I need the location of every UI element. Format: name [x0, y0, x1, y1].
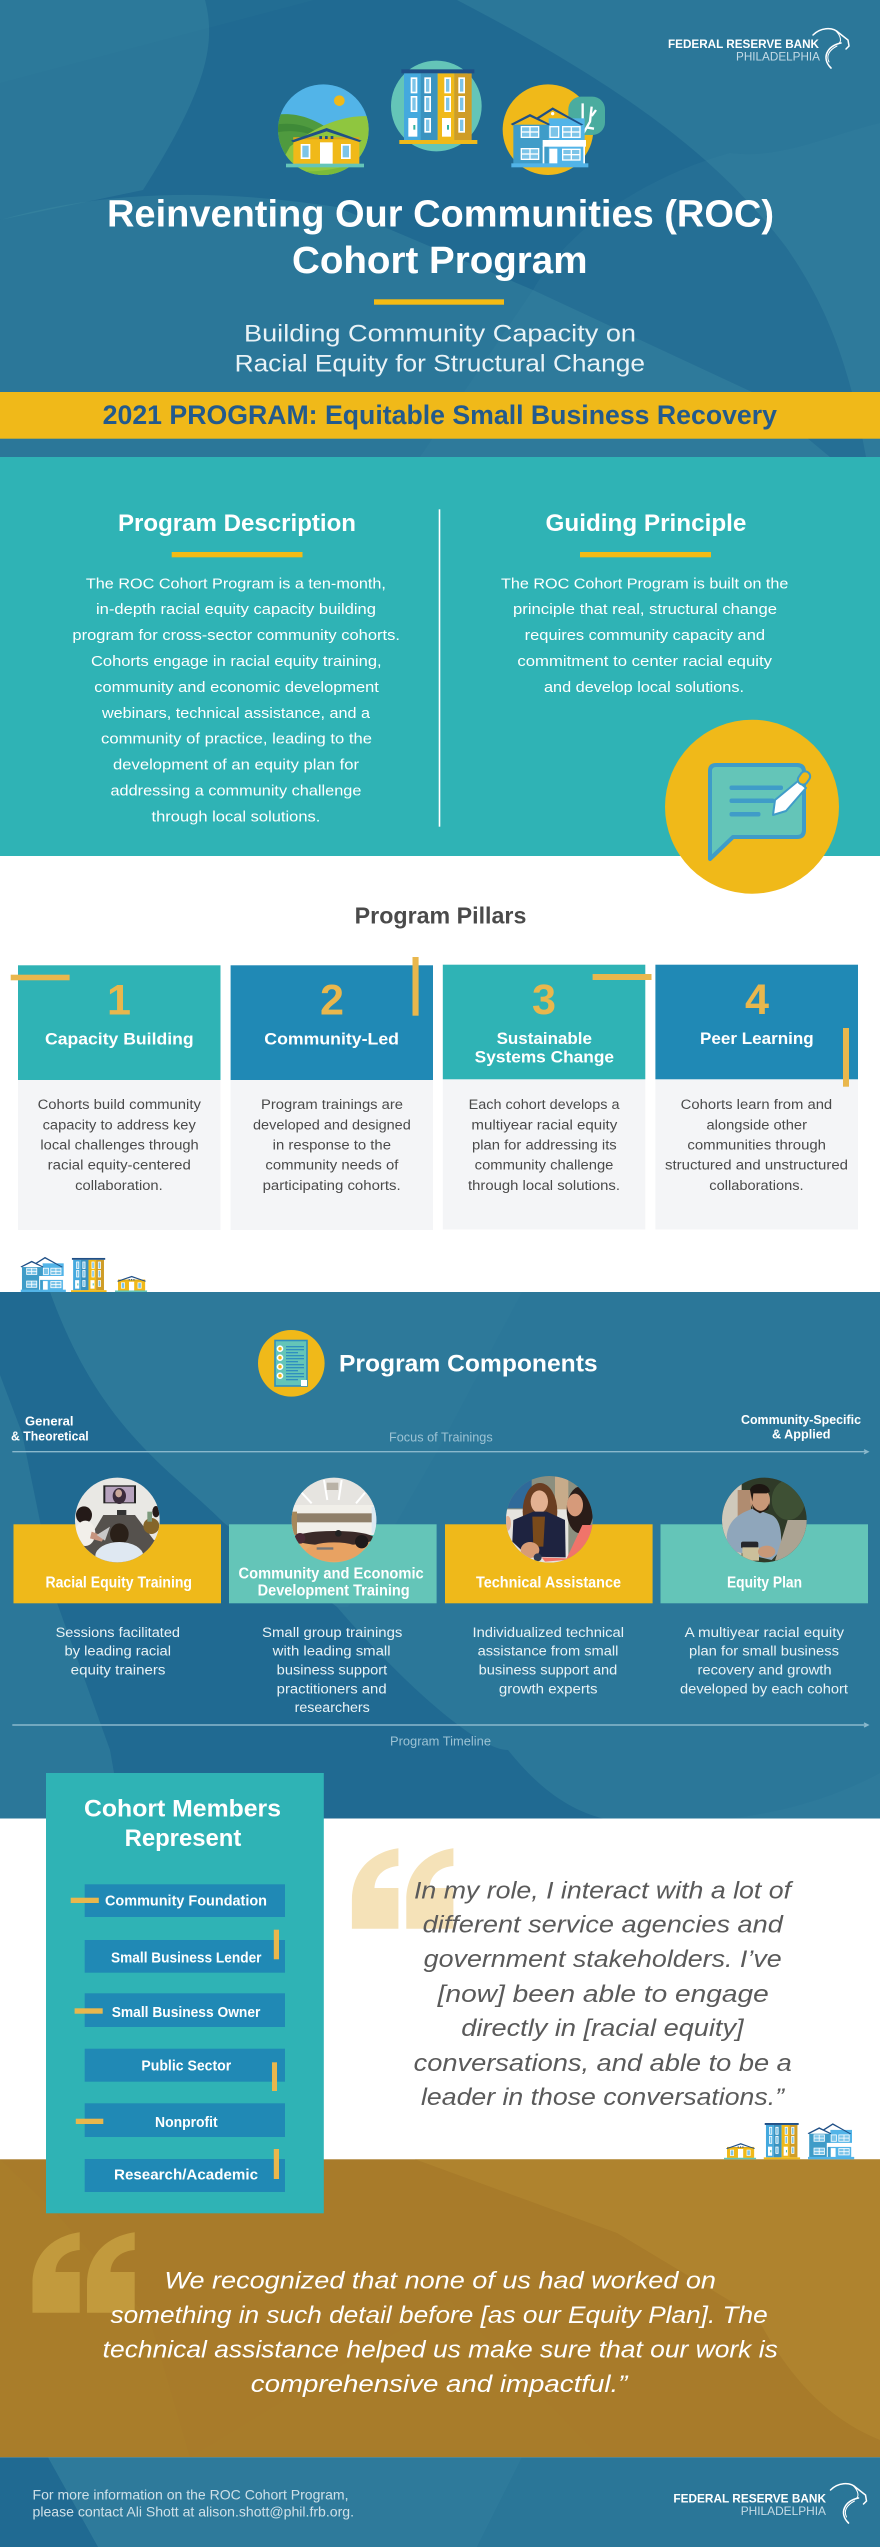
heading: cohort members represent: [84, 1796, 281, 1852]
text: program description: development of an equity plan for: [113, 758, 359, 774]
panel: component 2 community and economic development training: Community and Economic: [238, 1565, 424, 1582]
logo: Federal Reserve Bank Philadelphia: FEDERAL RESERVE BANK: [668, 37, 819, 51]
logo: Federal Reserve Bank Philadelphia: [668, 29, 849, 68]
text: component 4 description: [680, 1625, 848, 1696]
heading: cohort members represent: Cohort Members: [84, 1796, 281, 1823]
panel: pillar 1 capacity building: racial equity-centered: [48, 1158, 191, 1173]
text: quote two: comprehensive and impactful.”: [251, 2371, 629, 2398]
panel: pillar 3 sustainable systems change: plan for addressing its: [472, 1138, 617, 1152]
item: small business lender: Small Business Lender: [111, 1951, 262, 1967]
label: general and theoretical: General: [25, 1415, 74, 1429]
photo: man with laptop: [722, 1477, 808, 1563]
text: quote one: In my role, I interact with a lot of: [414, 1877, 794, 1904]
panel: pillar 1 capacity building: collaboration.: [75, 1178, 163, 1193]
item: small business lender: [85, 1930, 285, 1973]
item: public sector: Public Sector: [141, 2058, 232, 2074]
panel: header background: [0, 0, 880, 457]
subtitle: Building Community Capacity on: [244, 321, 636, 348]
panel: pillar 4 peer learning: collaborations.: [709, 1178, 804, 1193]
text: guiding principle: The ROC Cohort Program is built on the: [501, 576, 788, 592]
text: quote one: directly in [racial equity]: [461, 2015, 745, 2042]
heading: program pillars: Program Pillars: [355, 902, 526, 928]
panel: pillar 3 sustainable systems change: Systems Change: [475, 1049, 614, 1067]
icon: small town right: [724, 2123, 854, 2159]
text: guiding principle: and develop local solutions.: [544, 680, 744, 696]
label: general and theoretical: [11, 1415, 89, 1443]
text: quote one: conversations, and able to be a: [414, 2050, 792, 2077]
text: component 3 description: business support and: [479, 1663, 617, 1678]
panel: pillar 1 capacity building: Cohorts build community: [38, 1097, 201, 1112]
panel: component 4 equity plan: Equity Plan: [727, 1574, 802, 1591]
panel: pillar 3 sustainable systems change: community challenge: [475, 1158, 613, 1173]
panel: pillar 4 peer learning: alongside other: [706, 1118, 808, 1132]
text: program description: in-depth racial equity capacity building: [96, 602, 376, 618]
icon: quotation mark light: [352, 1848, 453, 1929]
heading: cohort members represent: Represent: [125, 1825, 241, 1852]
label: community-specific and applied: [741, 1413, 861, 1442]
item: nonprofit: Nonprofit: [155, 2115, 218, 2131]
panel: pillar 2 community-led: developed and designed: [253, 1118, 411, 1132]
text: component 1 description: Sessions facilitated: [56, 1625, 180, 1640]
panel: component 4 equity plan: [660, 1477, 868, 1603]
panel: pillar 1 capacity building: [11, 965, 221, 1230]
text: contact information: please contact Ali Shott at alison.shott@phil.frb.org.: [32, 2503, 354, 2519]
heading: program components: Program Components: [339, 1351, 598, 1378]
item: research/academic: [85, 2149, 285, 2192]
item: community foundation: [71, 1884, 285, 1917]
icon: quotation mark gold: [32, 2232, 135, 2313]
panel: pillar 1 capacity building: 1: [107, 976, 131, 1024]
text: program description: addressing a community challenge: [110, 784, 361, 800]
arrow: focus of trainings: [12, 1450, 868, 1454]
text: quote two: We recognized that none of us had worked on: [164, 2267, 716, 2294]
item: community foundation: Community Foundation: [105, 1894, 267, 1910]
icon: suburban house: [503, 84, 605, 175]
panel: pillar 3 sustainable systems change: Each cohort develops a: [469, 1097, 620, 1112]
panel: pillar 2 community-led: Program trainings are: [261, 1097, 403, 1112]
panel: footer background: [0, 2457, 880, 2547]
panel: pillar 1 capacity building: Capacity Building: [45, 1030, 194, 1048]
photo: video meeting: [75, 1478, 160, 1562]
icon: checklist document: [258, 1330, 325, 1397]
photo: two women talking: [504, 1475, 595, 1565]
panel: component 2 community and economic development training: [229, 1477, 437, 1603]
text: quote two: technical assistance helped us make sure that our work is: [103, 2336, 778, 2363]
panel: program components background: [0, 1292, 880, 1818]
panel: component 3 technical assistance: Technical Assistance: [476, 1574, 621, 1591]
text: component 2 description: researchers: [295, 1700, 370, 1715]
label: community-specific and applied: Community-Specific: [741, 1413, 861, 1427]
panel: pillar 2 community-led: in response to the: [273, 1138, 391, 1152]
text: program description: through local solutions.: [152, 809, 320, 825]
text: component 2 description: business support: [277, 1663, 387, 1678]
heading: guiding principle: Guiding Principle: [546, 510, 746, 537]
arrow: program timeline: [12, 1723, 868, 1727]
panel: pillar 2 community-led: [231, 957, 433, 1230]
text: component 2 description: practitioners and: [277, 1681, 387, 1696]
icon: apartment building: [391, 61, 482, 151]
title: Reinventing Our Communities (ROC): [107, 194, 774, 236]
text: component 4 description: plan for small business: [689, 1644, 839, 1659]
text: program description: [72, 576, 400, 825]
panel: pillar 1 capacity building: capacity to address key: [43, 1118, 196, 1132]
subtitle: [235, 321, 645, 378]
text: quote one: government stakeholders. I’ve: [424, 1946, 782, 1973]
logo: footer Federal Reserve Bank Philadelphia: [673, 2484, 866, 2523]
panel: pillar 2 community-led: participating cohorts.: [263, 1178, 401, 1193]
panel: description and guiding principle: [0, 457, 880, 856]
panel: pillar 2 community-led: Community-Led: [264, 1030, 399, 1048]
logo: footer Federal Reserve Bank Philadelphia: FEDERAL RESERVE BANK: [673, 2492, 826, 2506]
label: general and theoretical: & Theoretical: [11, 1429, 89, 1443]
text: guiding principle: requires community capacity and: [525, 628, 765, 644]
text: quote two: something in such detail before [as our Equity Plan]. The: [110, 2302, 768, 2329]
panel: pillar 2 community-led: 2: [320, 976, 344, 1024]
text: quote one: [414, 1877, 794, 2111]
text: program description: program for cross-sector community cohorts.: [72, 628, 400, 644]
banner: 2021 program: [0, 392, 880, 439]
text: component 3 description: growth experts: [499, 1681, 598, 1696]
panel: cohort members represent: [46, 1773, 324, 2213]
panel: pillar 4 peer learning: Peer Learning: [700, 1030, 814, 1048]
logo: footer Federal Reserve Bank Philadelphia: PHILADELPHIA: [741, 2504, 826, 2518]
text: component 1 description: [56, 1625, 180, 1678]
text: program description: Cohorts engage in racial equity training,: [91, 654, 382, 670]
text: program description: community of practice, leading to the: [101, 732, 372, 748]
panel: gold quote background: [0, 2159, 880, 2457]
panel: pillar 4 peer learning: structured and unstructured: [665, 1158, 848, 1173]
text: component 2 description: Small group trainings: [262, 1625, 403, 1640]
text: contact information: [32, 2486, 354, 2519]
heading: program description: Program Description: [118, 510, 356, 537]
text: component 2 description: [262, 1625, 403, 1715]
text: program description: webinars, technical assistance, and a: [101, 706, 371, 722]
item: small business owner: Small Business Owner: [112, 2005, 261, 2021]
photo: conference room: [290, 1477, 380, 1565]
text: component 3 description: assistance from small: [478, 1644, 618, 1659]
panel: pillar 2 community-led: community needs of: [265, 1158, 399, 1173]
text: quote one: [now] been able to engage: [437, 1981, 769, 2008]
text: component 1 description: by leading racial: [64, 1644, 171, 1659]
text: program description: The ROC Cohort Program is a ten-month,: [86, 576, 386, 592]
item: research/academic: Research/Academic: [114, 2168, 258, 2184]
logo: Federal Reserve Bank Philadelphia: PHILADELPHIA: [736, 50, 820, 64]
label: community-specific and applied: & Applied: [772, 1428, 830, 1442]
text: component 2 description: with leading small: [272, 1644, 391, 1659]
text: component 3 description: Individualized technical: [472, 1625, 624, 1640]
banner: 2021 program: 2021 PROGRAM: Equitable Small Business Recovery: [103, 400, 777, 430]
panel: component 1 racial equity training: Racial Equity Training: [46, 1574, 192, 1591]
panel: pillar 4 peer learning: communities through: [687, 1138, 826, 1152]
panel: pillar 3 sustainable systems change: multiyear racial equity: [471, 1118, 618, 1132]
panel: pillar 4 peer learning: 4: [745, 976, 769, 1024]
label: focus of trainings: Focus of Trainings: [389, 1431, 493, 1445]
text: quote two: [103, 2267, 778, 2398]
text: guiding principle: commitment to center racial equity: [517, 654, 773, 670]
panel: pillar 4 peer learning: Cohorts learn from and: [681, 1097, 832, 1112]
text: component 4 description: recovery and growth: [698, 1663, 832, 1678]
icon: rural house: [278, 84, 369, 175]
text: guiding principle: principle that real, structural change: [513, 602, 777, 618]
icon: small town left: [20, 1257, 147, 1292]
panel: pillar 3 sustainable systems change: through local solutions.: [468, 1178, 620, 1193]
item: nonprofit: [76, 2103, 285, 2137]
text: quote one: leader in those conversations.”: [421, 2084, 785, 2111]
text: quote one: different service agencies and: [423, 1912, 784, 1939]
item: public sector: [85, 2049, 285, 2091]
panel: component 3 technical assistance: [445, 1475, 653, 1603]
text: contact information: For more information on the ROC Cohort Program,: [32, 2486, 348, 2502]
panel: pillar 3 sustainable systems change: Sustainable: [497, 1030, 592, 1048]
panel: component 1 racial equity training: [14, 1477, 221, 1603]
item: small business owner: [75, 1993, 285, 2027]
panel: pillar 1 capacity building: local challenges through: [40, 1138, 199, 1152]
title: [107, 194, 774, 282]
label: program timeline: Program Timeline: [390, 1735, 491, 1749]
panel: pillar 3 sustainable systems change: [443, 965, 652, 1230]
subtitle: Racial Equity for Structural Change: [235, 351, 645, 378]
text: component 4 description: developed by each cohort: [680, 1681, 848, 1696]
text: program description: community and economic development: [94, 680, 379, 696]
panel: pillar 4 peer learning: [655, 965, 858, 1230]
text: guiding principle: [501, 576, 788, 696]
text: component 1 description: equity trainers: [71, 1663, 166, 1678]
panel: component 2 community and economic development training: Development Training: [258, 1583, 410, 1600]
icon: speech bubble with pencil: [665, 720, 839, 894]
title: Cohort Program: [292, 240, 588, 282]
text: component 3 description: [472, 1625, 624, 1696]
panel: pillar 3 sustainable systems change: 3: [532, 976, 556, 1024]
text: component 4 description: A multiyear racial equity: [685, 1625, 844, 1640]
